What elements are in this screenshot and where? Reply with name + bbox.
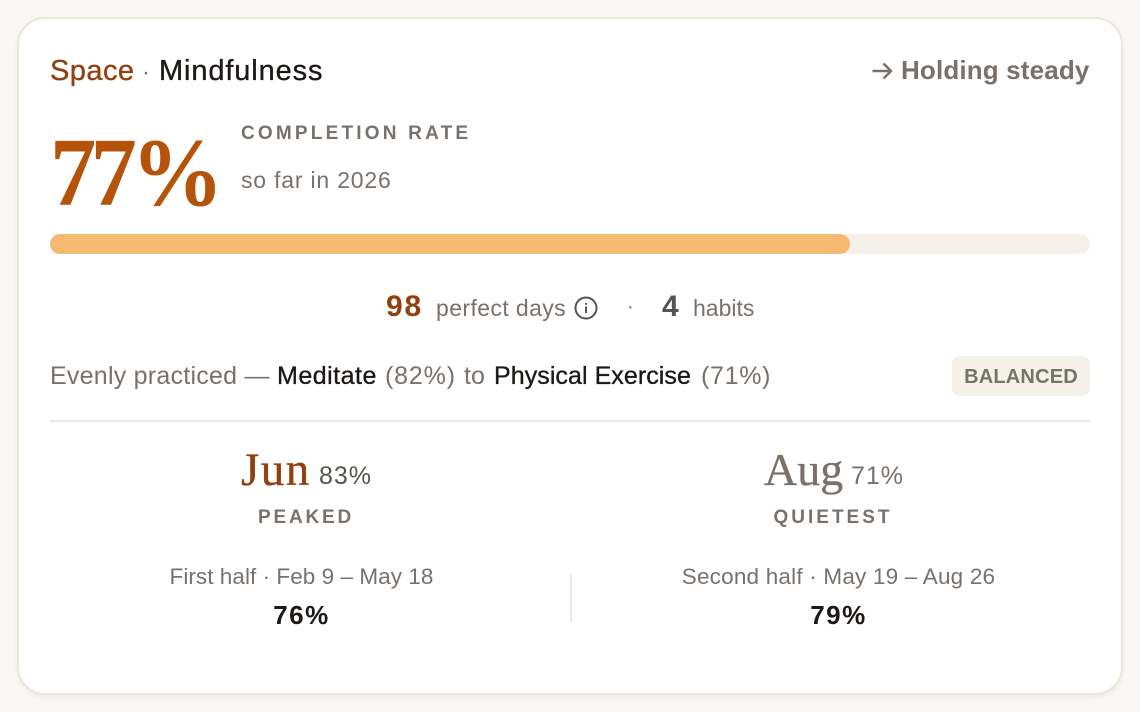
- balance sentence: to: [464, 362, 485, 390]
- peak value: 83%: [319, 462, 372, 490]
- progress fill: [50, 234, 850, 254]
- second half value: 79%: [810, 600, 867, 630]
- stat: habits: 4: [662, 290, 679, 323]
- first half value: 76%: [273, 600, 330, 630]
- big completion rate: 77%: [50, 119, 218, 227]
- heading: habit name: Mindfulness: [159, 55, 323, 87]
- icon: info: [574, 296, 598, 320]
- perfect days label: perfect days: [436, 295, 566, 321]
- divider: [50, 420, 1090, 422]
- vertical divider: [570, 574, 572, 622]
- icon: trend arrow: [872, 62, 893, 80]
- balance sentence: (82%): [385, 362, 456, 390]
- separator dot: ·: [627, 296, 634, 318]
- balance sentence: [50, 362, 771, 390]
- balanced badge: [952, 356, 1090, 396]
- quietest label: QUIETEST: [773, 507, 893, 528]
- heading separator: ·: [142, 59, 150, 86]
- balance sentence: Meditate: [277, 362, 377, 390]
- period text: so far in 2026: [241, 167, 392, 193]
- first half range: First half · Feb 9 – May 18: [170, 564, 433, 589]
- balanced badge: BALANCED: [964, 366, 1078, 388]
- trend label: Holding steady: [901, 55, 1089, 85]
- peaked label: PEAKED: [258, 507, 354, 528]
- completion rate label: COMPLETION RATE: [241, 123, 471, 144]
- quiet month: Aug: [764, 444, 843, 495]
- quiet value: 71%: [851, 462, 904, 490]
- heading: category: Space: [50, 55, 134, 87]
- stat: perfect days: 98: [386, 290, 423, 323]
- peak month: Jun: [241, 444, 311, 496]
- habits label: habits: [693, 295, 754, 321]
- balance sentence: Physical Exercise: [494, 362, 691, 390]
- balance sentence: (71%): [701, 362, 771, 390]
- progress bar: [50, 234, 1090, 254]
- balance sentence: Evenly practiced —: [50, 362, 270, 390]
- second half range: Second half · May 19 – Aug 26: [682, 564, 995, 589]
